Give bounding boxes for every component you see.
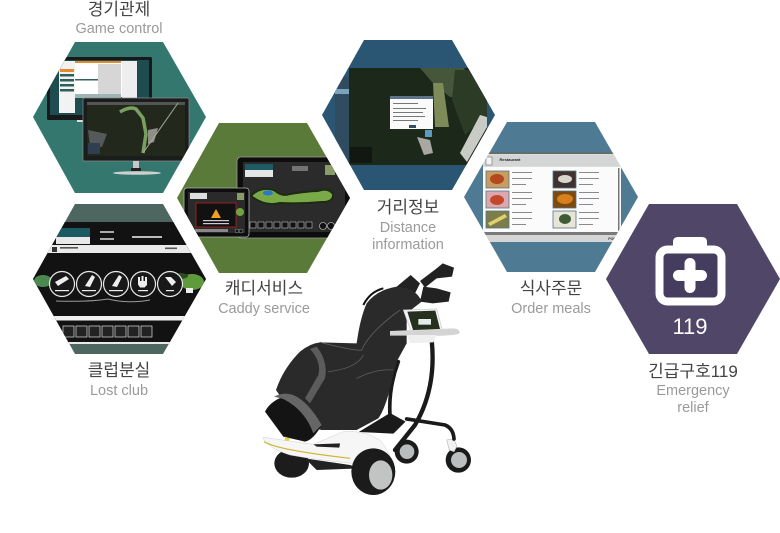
toolbar icons [63,326,152,337]
heading: lost club: Lost club [90,383,148,399]
panel: distance information [322,40,495,190]
heading: distance information: Distance [380,220,436,236]
golf club heads [397,263,454,303]
bag seams [320,288,400,378]
heading: emergency relief: Emergency [656,383,730,399]
rear small wheels [395,439,471,473]
heading: caddy service: 캐디서비스 [225,279,303,298]
heading: distance information: information [372,237,444,253]
heading: emergency relief: relief [677,400,710,416]
panel: emergency relief [606,204,780,354]
panel: caddy service [177,123,357,273]
panel: order meals [464,122,638,272]
heading: game control: 경기관제 [88,0,150,19]
hexagon: order meals [464,122,638,272]
golf cart [263,263,471,495]
white deck [263,431,390,470]
hexagon: lost club [33,204,206,354]
dialog box [390,96,433,129]
front monitor [83,98,189,175]
tablet mount [390,309,460,343]
satellite map [335,68,487,165]
heading: distance information [372,198,444,253]
bag grey band [305,347,326,403]
front wheel [351,448,395,495]
golf bag [276,287,422,430]
label: 119: 119 [672,314,708,339]
heading: game control: Game control [75,21,163,37]
heading: order meals: Order meals [511,301,591,317]
heading: lost club [88,361,150,399]
frame [360,340,454,450]
heading: order meals [511,279,591,317]
heading: caddy service [218,279,310,317]
screen: lost club [33,222,206,344]
icons: five category circles [50,272,182,296]
hexagon: distance information [322,40,495,190]
small tablet with warning [184,188,249,237]
hexagon: emergency relief [606,204,780,354]
hexagon: caddy service [177,123,350,273]
hexagon: game control [33,42,206,193]
heading: lost club: 클럽분실 [88,361,150,380]
large tablet [237,157,357,238]
heading: caddy service: Caddy service [218,301,310,317]
panel: game control [33,42,206,193]
icon: first aid kit [660,237,722,302]
heading: game control [75,0,163,37]
food thumbnails [486,171,576,228]
restaurant screen: POP [608,237,616,241]
heading: distance information: 거리정보 [377,198,439,217]
menu text lines [512,172,599,225]
heading: order meals: 식사주문 [520,279,582,298]
rear wheel left [274,449,309,478]
bag base [265,394,322,442]
back monitor [47,57,152,122]
restaurant screen: Restaurant [500,157,521,162]
restaurant screen [483,152,621,242]
heading: emergency relief [648,362,738,416]
panel: lost club [33,204,206,354]
heading: emergency relief: 긴급구호119 [648,362,738,381]
